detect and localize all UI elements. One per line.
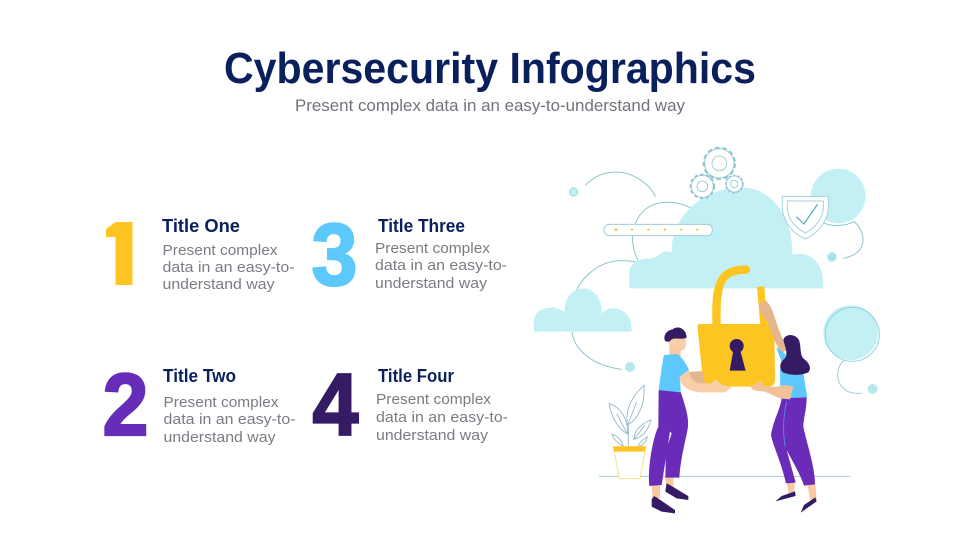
woman shoes [775,491,796,501]
description: data in an easy-to- [375,257,507,274]
number 3: 3 [312,205,358,304]
woman hair [780,335,810,375]
description: Present complex [164,394,279,411]
man neck and head [669,343,681,357]
lower left arc and bubble [572,332,635,372]
heading: Title Three [378,215,465,236]
woman legs [787,482,795,493]
gears [690,148,743,198]
subtitle: Present complex data in an easy-to-understand way [295,96,685,115]
item 2: Title Two [102,355,296,454]
description: Present complex [376,391,492,408]
man legs [652,485,660,498]
heading: Title Four [378,365,454,386]
woman [751,301,817,513]
shield with check [782,196,828,239]
shackle [761,287,764,325]
description: Present complex [162,242,278,259]
man back arm [687,371,705,385]
woman raised arm [760,301,787,353]
description: data in an easy-to- [376,409,508,426]
woman arm [751,381,793,399]
number 4: 4 [312,355,359,454]
description: data in an easy-to- [162,259,294,276]
man [649,327,732,513]
heading: Title Two [163,365,236,386]
heading: Title One [162,215,240,236]
man shoes [652,496,675,513]
large cloud [629,187,823,288]
description: understand way [164,429,276,446]
description: data in an easy-to- [164,411,296,428]
woman trousers [771,397,815,486]
description: understand way [162,276,275,293]
padlock [697,270,775,387]
right circle with tail [823,305,879,394]
title: Cybersecurity Infographics [224,44,756,93]
item 1: Title One [106,218,294,292]
ground line [599,475,850,478]
number 1: 1 [99,204,145,311]
small cloud [534,288,632,332]
body [697,324,775,387]
description: understand way [376,427,489,444]
circle behind shield [811,169,866,223]
keyhole [730,339,746,371]
illustration: people carrying padlock [572,270,879,513]
man shirt [659,354,689,392]
pot [613,447,646,479]
number 2: 2 [102,355,148,454]
small bubbles [569,187,837,262]
item 4: Title Four [312,355,508,454]
description: Present complex [375,240,491,257]
woman shirt [776,347,807,399]
connector arcs [577,172,863,290]
item 3: Title Three [312,205,507,304]
password bar [604,224,712,236]
plant [609,385,651,479]
illustration: upper cloud scene [534,148,866,332]
man front arm [679,370,732,392]
man trousers [649,390,688,486]
description: understand way [375,275,488,292]
